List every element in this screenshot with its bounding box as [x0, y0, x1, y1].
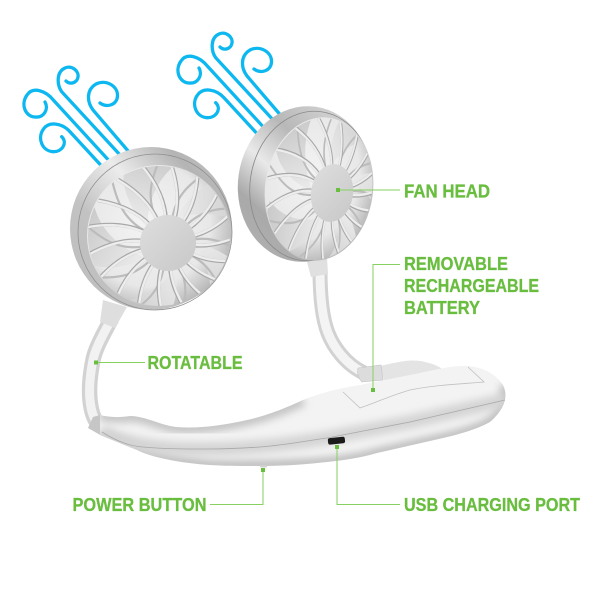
- fan head, right: [238, 106, 374, 262]
- label: fan head: FAN HEAD: [404, 180, 490, 202]
- leader: rotatable: [94, 360, 145, 364]
- neckband body: [88, 361, 505, 468]
- leader: battery: [371, 264, 400, 392]
- seam line: [102, 400, 505, 449]
- label: removable rechargeable battery: RECHARGEABLE: [404, 275, 539, 296]
- label: removable rechargeable battery: BATTERY: [404, 297, 481, 318]
- icon: air flow lines, left fan: [24, 67, 129, 167]
- battery cover outline: [343, 367, 484, 408]
- flexible tube, right: [307, 257, 364, 373]
- label: removable rechargeable battery: [404, 253, 539, 318]
- leader: power button: [210, 468, 265, 504]
- leader: USB port: [335, 445, 400, 504]
- label: USB charging port: USB CHARGING PORT: [404, 494, 581, 515]
- leader: fan head: [336, 188, 400, 192]
- power button nub: [260, 465, 267, 468]
- label: power button: POWER BUTTON: [72, 494, 206, 515]
- icon: air flow lines, right fan: [178, 33, 283, 133]
- USB port: [328, 437, 345, 445]
- label: rotatable: ROTATABLE: [148, 352, 242, 373]
- fan head, left: [70, 147, 232, 310]
- flexible tube, left: [90, 300, 127, 424]
- label: removable rechargeable battery: REMOVABLE: [404, 253, 508, 274]
